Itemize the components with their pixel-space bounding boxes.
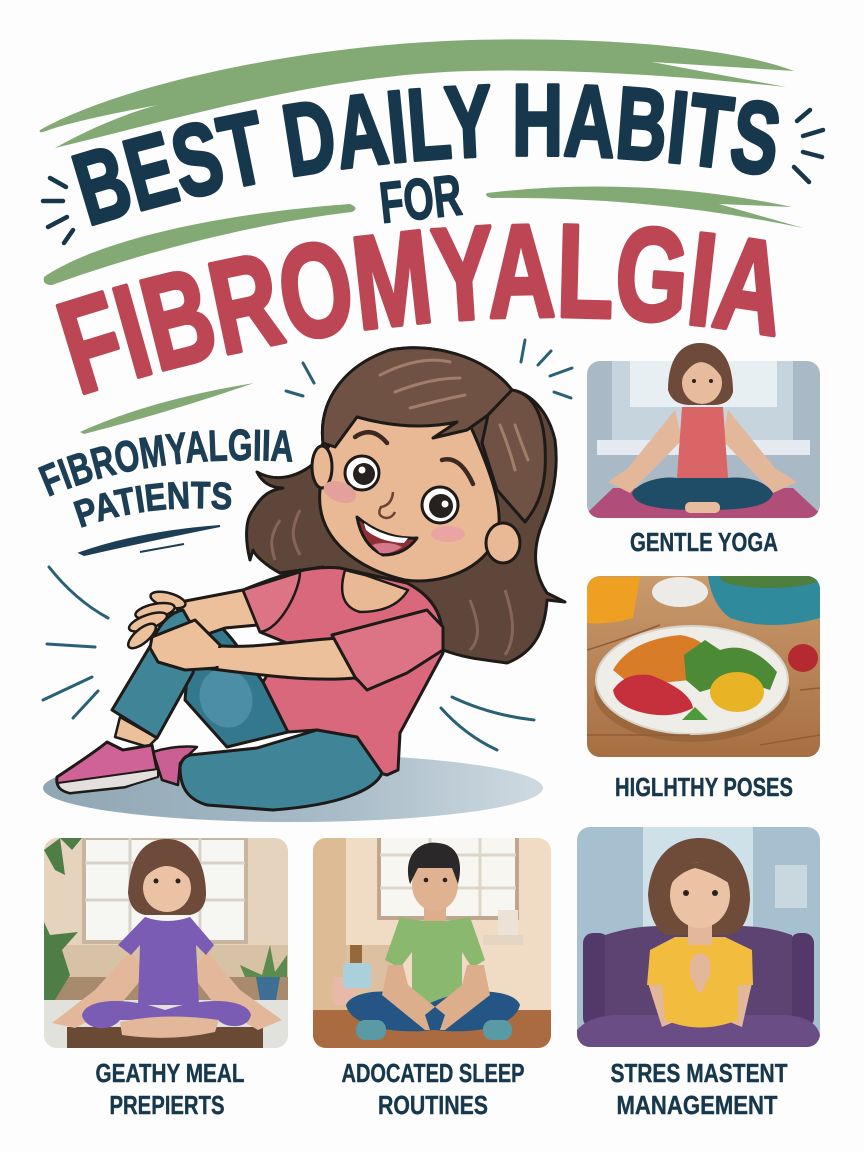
title line: fibromyalgia: FIBROMYALGIA	[56, 223, 776, 396]
panel: healthy meal	[587, 568, 820, 802]
sleeves	[332, 610, 443, 690]
caption: ADOCATED SLEEP	[342, 1058, 524, 1088]
illustration: cartoon girl sitting with knees up	[43, 340, 572, 822]
brows	[355, 432, 473, 484]
title	[56, 83, 780, 396]
back shoe	[153, 747, 197, 785]
title line: for: FOR	[380, 175, 464, 224]
cheeks	[321, 477, 359, 507]
hair strands	[272, 510, 512, 655]
yoga caption: GENTLE YOGA	[630, 527, 778, 557]
meal image	[587, 568, 820, 757]
label: fibromyalgia patients: PATIENTS	[73, 481, 232, 528]
panel: meal prep woman: PREPIERTS	[110, 1090, 224, 1120]
lower hand	[150, 620, 220, 670]
man seated image	[313, 836, 551, 1048]
label: fibromyalgia patients	[38, 428, 292, 556]
shin	[115, 717, 157, 747]
upper hand with fingers	[124, 589, 187, 652]
mouth	[357, 517, 417, 555]
hair back	[247, 348, 565, 663]
floor shadow	[43, 754, 543, 822]
panel: sleep routines man	[313, 836, 551, 1120]
yoga figure head	[668, 343, 733, 405]
yoga image	[582, 361, 825, 518]
back thigh	[185, 612, 288, 747]
thigh highlight	[191, 661, 261, 735]
title accent dashes	[43, 110, 823, 243]
caption: STRES MASTENT	[610, 1058, 788, 1088]
label: fibromyalgia patients: FIBROMYALGIIA	[38, 428, 292, 497]
eyes	[345, 456, 379, 490]
shoe sole	[58, 769, 158, 793]
panel: stress management: MANAGEMENT	[616, 1090, 778, 1120]
front shoe	[57, 742, 158, 793]
hair highlights	[380, 360, 528, 470]
woman meditating image	[44, 838, 288, 1048]
wrist blend	[212, 648, 228, 666]
floor leg	[180, 730, 382, 810]
decorative green brush strokes	[40, 39, 803, 434]
caption: GEATHY MEAL	[96, 1058, 245, 1088]
upper far arm	[175, 590, 258, 640]
front knee leg	[112, 610, 200, 738]
motion lines	[43, 340, 572, 750]
panel: gentle yoga	[582, 343, 825, 557]
meal caption: HIGLHTHY POSES	[615, 772, 793, 802]
shirt neckline	[342, 570, 408, 612]
nose	[379, 492, 395, 518]
panel: meal prep woman	[44, 838, 288, 1120]
face	[320, 417, 499, 581]
side hair panel	[482, 390, 545, 522]
title line: best daily habits: BEST DAILY HABITS	[71, 83, 780, 226]
panel: sleep routines man: ROUTINES	[378, 1090, 488, 1120]
ears	[312, 446, 332, 488]
panel: stress management	[577, 827, 820, 1120]
near arm	[205, 638, 367, 687]
fringe top	[322, 348, 512, 447]
stress image	[577, 827, 820, 1047]
shirt body	[243, 567, 443, 775]
